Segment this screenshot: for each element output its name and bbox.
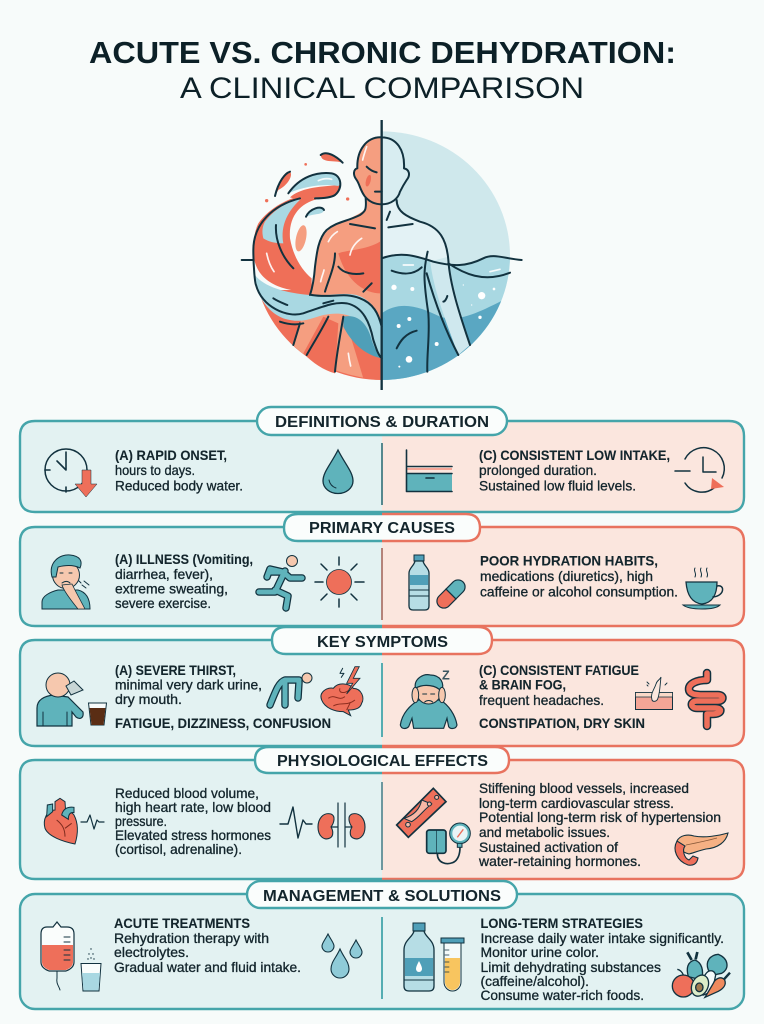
text: long-term strategies (480, 915, 724, 1003)
icon: large water bottle (404, 923, 434, 991)
text: blood volume: (cortisol, adrenaline). (115, 841, 242, 857)
text: acute treatments: ACUTE TREATMENTS (114, 915, 250, 931)
text: consistent low intake (479, 447, 670, 494)
text: severe thirst (115, 662, 331, 731)
bubbles (391, 284, 495, 368)
text: consistent fatigue (479, 662, 645, 731)
icon: person with headache: Z (442, 668, 450, 682)
text: long-term strategies: LONG-TERM STRATEGIES (480, 915, 643, 931)
text: acute treatments: Rehydration therapy with (114, 930, 269, 946)
text: long-term strategies: Increase daily water intake significantly. (480, 930, 724, 946)
panel: definitions and duration (20, 407, 744, 512)
icon: pancreas (675, 833, 728, 865)
panel: physiological effects (20, 747, 744, 879)
text: blood volume: Reduced blood volume, (115, 785, 259, 801)
heading: management and solutions: MANAGEMENT & SOLUTIONS (263, 888, 501, 905)
text: long-term vascular effects: Stiffening blood vessels, increased (479, 780, 689, 796)
text: blood volume (115, 785, 271, 857)
text: long-term strategies: (caffeine/alcohol). (480, 973, 589, 989)
icon: heart (44, 798, 77, 844)
icon: glass of water with dots (81, 948, 101, 991)
body (293, 197, 382, 380)
text: blood volume: Elevated stress hormones (115, 827, 271, 843)
text: rapid onset (115, 447, 243, 494)
text: illness: diarrhea, fever), (115, 566, 213, 582)
text: poor hydration habits (480, 552, 678, 600)
icon: blood pressure cuff (427, 823, 470, 864)
title: ACUTE VS. CHRONIC DEHYDRATION: (89, 35, 676, 70)
text: long-term vascular effects (478, 780, 721, 869)
title (89, 35, 676, 105)
icon: running person (259, 556, 302, 608)
icon: water-rich foods (672, 952, 730, 999)
icon: water drop (323, 450, 353, 494)
panel: primary causes (20, 514, 744, 626)
text: illness: severe exercise. (115, 595, 211, 611)
icon: water bottle (409, 555, 429, 610)
text: rapid onset: (A) RAPID ONSET, (115, 447, 227, 463)
ribbon (255, 275, 382, 358)
icon: large pulse line (280, 807, 312, 838)
text: acute treatments: Gradual water and fluid intake. (114, 959, 301, 975)
text: poor hydration habits: medications (diuretics), high (480, 568, 653, 584)
icon: dark urine glass (88, 703, 106, 725)
icon: capsule (434, 577, 468, 611)
text: long-term vascular effects: Potential long-term risk of hypertension (479, 809, 721, 825)
icon: intestines (689, 673, 722, 726)
text: long-term vascular effects: and metabolic issues. (479, 824, 610, 840)
text: illness: extreme sweating, (115, 580, 228, 596)
text: illness: (A) ILLNESS (Vomiting, (115, 551, 253, 567)
icon: small pulse line (81, 815, 104, 829)
icon: water drops (322, 934, 362, 978)
text: rapid onset: hours to days. (115, 462, 195, 478)
heading: primary causes (284, 514, 480, 541)
outlines (242, 137, 522, 372)
text: consistent fatigue: frequent headaches. (479, 692, 604, 708)
icon: sick man coughing (42, 555, 90, 609)
text: severe thirst: FATIGUE, DIZZINESS, CONFUSION (115, 715, 331, 731)
icon: clock with down arrow (45, 449, 97, 497)
text: consistent fatigue: (C) CONSISTENT FATIGUE (479, 662, 639, 678)
text: long-term vascular effects: water-retaining hormones. (478, 853, 641, 869)
splash drops (275, 172, 291, 196)
icon: clock with slow arrow (675, 448, 724, 492)
heading: definitions: DEFINITIONS & DURATION (275, 414, 489, 431)
text: poor hydration habits: caffeine or alcohol consumption. (480, 584, 678, 600)
text: consistent fatigue: CONSTIPATION, DRY SKIN (479, 715, 645, 731)
icon: person with headache (400, 668, 457, 728)
text: long-term strategies: Limit dehydrating substances (480, 959, 661, 975)
heading: key symptoms: KEY SYMPTOMS (317, 634, 448, 651)
text: blood volume: high heart rate, low blood (115, 799, 271, 815)
text: long-term vascular effects: Sustained activation of (479, 839, 618, 855)
text: acute treatments (114, 915, 301, 975)
icon: dry skin (636, 677, 672, 710)
text: acute treatments: electrolytes. (114, 944, 189, 960)
text: long-term strategies: Consume water-rich foods. (480, 987, 644, 1003)
text: consistent low intake: prolonged duration. (479, 462, 597, 478)
text: severe thirst: minimal very dark urine, (115, 676, 262, 692)
panel: management and solutions (20, 881, 744, 1009)
heading: definitions (257, 407, 507, 435)
icon: IV bag (41, 922, 74, 990)
icon: urine test tube (441, 938, 464, 991)
text: consistent low intake: Sustained low fluid levels. (479, 478, 636, 494)
heading: physiological effects (255, 747, 509, 773)
icon: low fluid tank (406, 450, 452, 492)
heading: key symptoms (272, 627, 492, 654)
icon: kidneys (318, 803, 365, 847)
text: long-term vascular effects: long-term cardiovascular stress. (479, 795, 674, 811)
text: long-term strategies: Monitor urine color. (480, 944, 599, 960)
icon: stiff blood vessel (397, 788, 446, 837)
hero illustration: half-and-half body with water (242, 120, 522, 390)
icon: sun (315, 557, 364, 607)
title: A CLINICAL COMPARISON (180, 72, 584, 105)
text: poor hydration habits: POOR HYDRATION HABITS, (480, 552, 658, 568)
highlights (267, 147, 500, 366)
text: severe thirst: (A) SEVERE THIRST, (115, 662, 236, 678)
icon: coffee cup (683, 568, 723, 609)
icon: dizzy bent person (270, 673, 312, 705)
text: blood volume: pressure. (115, 813, 167, 829)
heading: physiological effects: PHYSIOLOGICAL EFFECTS (277, 753, 488, 770)
icon: brain with lightning (321, 667, 363, 716)
heading: primary causes: PRIMARY CAUSES (309, 520, 455, 537)
text: consistent fatigue: & BRAIN FOG, (479, 676, 566, 692)
icon: person drinking (37, 673, 83, 726)
heading: management and solutions (247, 881, 517, 908)
text: rapid onset: Reduced body water. (115, 478, 243, 494)
text: illness (115, 551, 253, 611)
panel: key symptoms (20, 627, 744, 746)
text: consistent low intake: (C) CONSISTENT LOW INTAKE, (479, 447, 670, 463)
text: severe thirst: dry mouth. (115, 691, 182, 707)
